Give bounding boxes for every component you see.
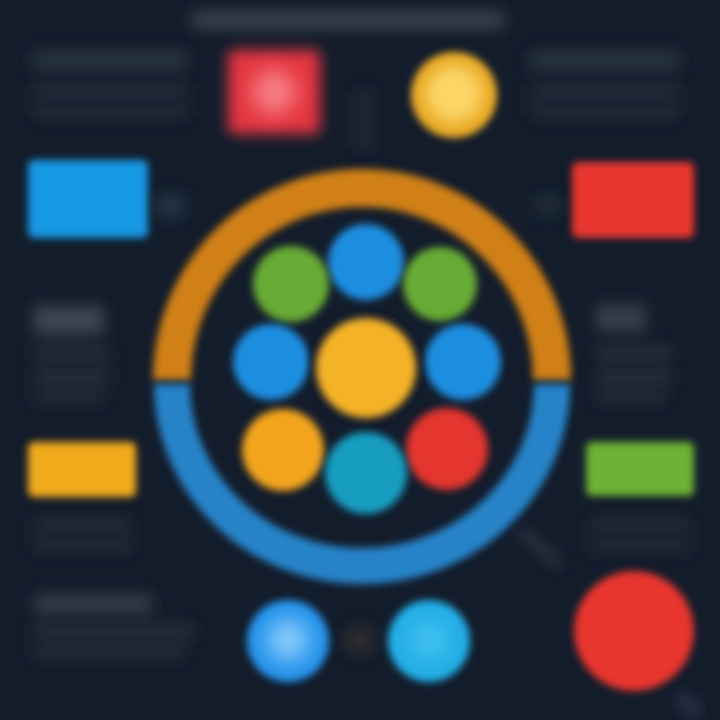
text block: lower left — [34, 518, 132, 552]
node: upper right green — [403, 247, 477, 321]
connector: right — [535, 194, 560, 216]
text block: top right — [530, 50, 680, 118]
text block: middle right — [596, 304, 672, 402]
node: left blue — [233, 324, 309, 400]
node: right blue — [425, 324, 501, 400]
bar: red top right — [572, 162, 694, 238]
icon: cyan circle — [388, 600, 470, 682]
connector: top — [352, 90, 374, 150]
bar: amber left — [28, 442, 136, 497]
node: upper left green — [253, 246, 329, 322]
bar: green right — [586, 442, 694, 496]
icon: red square — [228, 50, 320, 134]
connector: bottom right corner — [678, 695, 700, 715]
title — [192, 10, 504, 30]
text block: bottom left — [34, 594, 194, 658]
connector: diagonal to red circle — [520, 530, 560, 565]
text block: lower right — [590, 518, 690, 552]
ring: orange upper arc — [172, 188, 552, 380]
icon: yellow circle — [411, 52, 497, 138]
text block: middle left — [34, 306, 110, 402]
bar: blue top left — [28, 160, 148, 238]
ring: blue lower arc — [172, 384, 552, 566]
icon: light blue circle — [247, 600, 329, 682]
node: lower right red — [406, 408, 488, 490]
node: lower left amber — [242, 409, 324, 491]
node: center yellow — [312, 314, 420, 422]
text block: top left — [32, 50, 187, 118]
icon: large red circle — [574, 571, 694, 691]
diagram: central cluster — [233, 224, 501, 514]
node: bottom teal — [325, 432, 407, 514]
node: top blue — [328, 224, 404, 300]
connector: bottom — [345, 626, 373, 654]
connector: left — [155, 194, 185, 218]
